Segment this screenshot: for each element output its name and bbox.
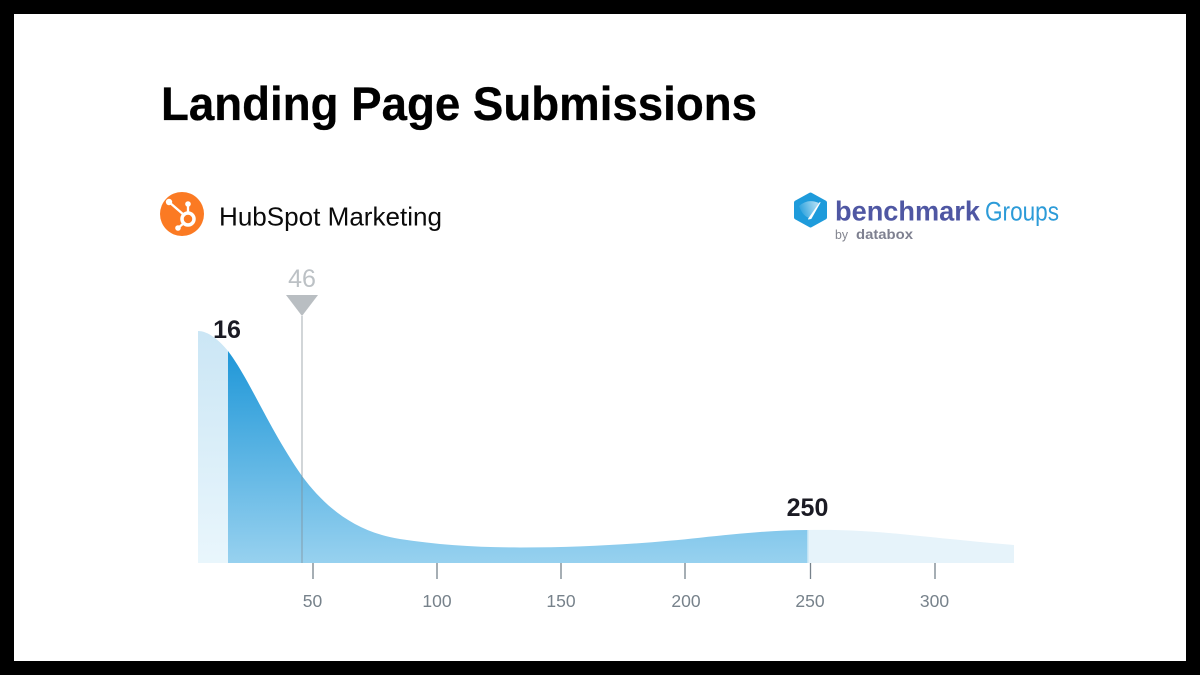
label 250: 250 [787,494,828,522]
x axis: 250 [795,591,825,611]
heading: HubSpot Marketing: HubSpot Marketing [219,202,442,232]
highlighted area 16 to 250 [228,351,808,563]
logo wordmark secondary: Groups [985,196,1059,226]
logo byline databox: databox [856,226,913,242]
left tail area [198,331,228,563]
x axis: 50 [303,591,322,611]
x axis: 200 [671,591,701,611]
label 46: 46 [288,265,316,293]
logo: Benchmark Groups by Databox [796,194,1059,242]
x axis [303,563,949,611]
logo byline by: by [835,228,849,242]
title: Landing Page Submissions [161,77,757,130]
label 16: 16 [213,316,241,344]
marker: average 46 [286,265,318,563]
x axis: 100 [422,591,452,611]
x axis: 300 [920,591,949,611]
chart: distribution curve [198,331,1014,563]
icon: HubSpot logo [160,192,204,236]
right tail area [808,530,1014,563]
icon: hexagon [796,194,825,226]
x axis: 150 [546,591,576,611]
logo wordmark: benchmark [835,196,980,226]
